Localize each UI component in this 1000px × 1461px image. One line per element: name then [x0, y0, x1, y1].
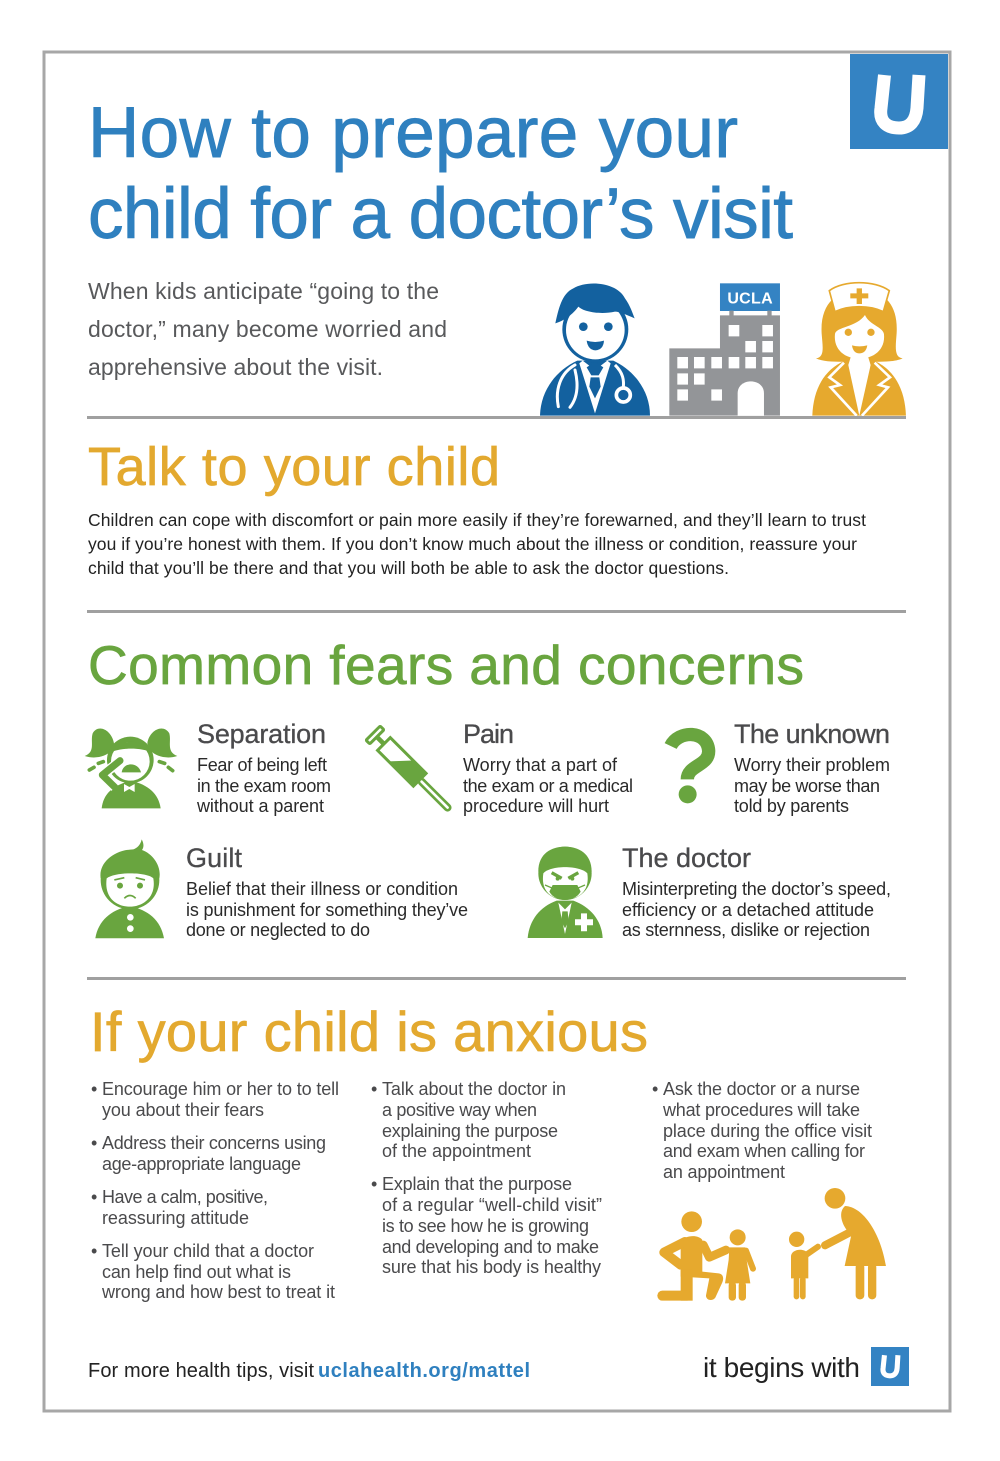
text: separation: without a parent [196, 796, 324, 816]
list: column two [371, 1079, 602, 1277]
intro text: When kids anticipate “going to the [88, 278, 439, 304]
title: child for a doctor’s visit [88, 175, 793, 254]
text: guilt [186, 879, 468, 940]
text block: talk to your child: you if you’re honest with them. If you don’t know much about the illness or condition, reassure your [88, 534, 857, 554]
list: column two: • [371, 1079, 377, 1099]
list: column one: you about their fears [102, 1100, 264, 1120]
text: separation: Fear of being left [197, 755, 327, 775]
text: the doctor: as sternness, dislike or rejection [622, 920, 870, 940]
list: column one: reassuring attitude [102, 1208, 249, 1228]
title [88, 94, 793, 254]
text: the doctor: efficiency or a detached attitude [622, 900, 874, 920]
text: the doctor [622, 879, 891, 940]
heading: guilt: Guilt [186, 843, 242, 873]
list: column two: of a regular “well-child visit” [382, 1195, 602, 1215]
list: column three: and exam when calling for [663, 1141, 865, 1161]
heading: the unknown: The unknown [734, 719, 890, 749]
intro text [88, 278, 447, 380]
list: column three: what procedures will take [662, 1100, 860, 1120]
icon: nurse [812, 283, 906, 416]
text: guilt: is punishment for something they’ve [186, 900, 468, 920]
text: guilt: Belief that their illness or condition [186, 879, 458, 899]
text: guilt: done or neglected to do [186, 920, 370, 940]
panel: guilt [95, 839, 468, 940]
list: column one: age-appropriate language [102, 1154, 301, 1174]
heading: separation: Separation [197, 719, 326, 749]
list: column one [91, 1079, 339, 1302]
list: column one: wrong and how best to treat it [101, 1282, 335, 1302]
list: column one: Encourage him or her to to tell [102, 1079, 339, 1099]
list: column one: Have a calm, positive, [102, 1187, 268, 1207]
logo: U badge [850, 54, 948, 149]
text block: talk to your child [88, 510, 866, 578]
icon: masked doctor [528, 847, 603, 938]
text: the unknown: told by parents [734, 796, 849, 816]
text: the doctor: Misinterpreting the doctor’s speed, [622, 879, 891, 899]
list: column one: Address their concerns using [102, 1133, 326, 1153]
icon: crying girl [85, 729, 177, 808]
list: column one: • [91, 1241, 97, 1261]
footer: health tips link: uclahealth.org/mattel [318, 1360, 530, 1382]
list: column two: Talk about the doctor in [382, 1079, 566, 1099]
footer: health tips link: For more health tips, visit [88, 1360, 314, 1382]
text: pain: Worry that a part of [463, 755, 618, 775]
list: column one: Tell your child that a doctor [102, 1241, 314, 1261]
icon: syringe [366, 726, 457, 817]
list: column three: • [652, 1079, 658, 1099]
icon: sad child [95, 839, 164, 938]
icon: UCLA hospital building [669, 283, 780, 416]
list: column one: • [91, 1187, 97, 1207]
heading: if your child is anxious: If your child is anxious [90, 1000, 648, 1063]
heading: common fears and concerns: Common fears and concerns [88, 634, 804, 696]
text: the unknown: Worry their problem [734, 755, 890, 775]
icon: question mark [671, 735, 709, 803]
text block: talk to your child: Children can cope with discomfort or pain more easily if they’re forewarned, and they’ll learn to trust [88, 510, 866, 530]
list: column two: sure that his body is healthy [382, 1257, 601, 1277]
footer: it begins with U logo: it begins with [703, 1352, 860, 1383]
heading: the doctor: The doctor [622, 843, 751, 873]
panel: separation [85, 719, 331, 816]
heading: talk to your child: Talk to your child [88, 437, 500, 497]
text: pain [463, 755, 633, 816]
list: column three: an appointment [663, 1162, 785, 1182]
list: column three: place during the office visit [663, 1121, 872, 1141]
text: the unknown [734, 755, 890, 816]
list: column three [652, 1079, 872, 1182]
text: the unknown: may be worse than [734, 776, 880, 796]
intro text: apprehensive about the visit. [88, 354, 383, 380]
text: separation: in the exam room [197, 776, 331, 796]
icon: parent kneeling with child [657, 1211, 753, 1301]
list: column two: and developing and to make [382, 1237, 599, 1257]
list: column one: can help find out what is [102, 1262, 291, 1282]
list: column two: • [371, 1174, 377, 1194]
icon: UCLA hospital building: UCLA [727, 290, 773, 307]
list: column one: • [91, 1079, 97, 1099]
text: pain: procedure will hurt [463, 796, 609, 816]
list: column two: of the appointment [382, 1141, 531, 1161]
intro text: doctor,” many become worried and [88, 316, 447, 342]
text: pain: the exam or a medical [463, 776, 633, 796]
footer: health tips link [88, 1360, 530, 1382]
list: column two: a positive way when [382, 1100, 537, 1120]
icon: parent holding child's hand [789, 1188, 886, 1299]
panel: the unknown [671, 719, 890, 816]
footer: it begins with U logo [703, 1347, 909, 1386]
list: column two: is to see how he is growing [382, 1216, 589, 1236]
text: separation [196, 755, 331, 816]
list: column two: explaining the purpose [382, 1121, 558, 1141]
panel: pain [366, 719, 633, 817]
list: column one: • [91, 1133, 97, 1153]
text block: talk to your child: child that you’ll be there and that you will both be able to ask the doctor questions. [88, 558, 729, 578]
panel: the doctor [528, 843, 891, 940]
list: column two: Explain that the purpose [382, 1174, 572, 1194]
icon: doctor [540, 283, 650, 416]
list: column three: Ask the doctor or a nurse [663, 1079, 860, 1099]
heading: pain: Pain [463, 719, 514, 749]
title: How to prepare your [88, 94, 738, 173]
